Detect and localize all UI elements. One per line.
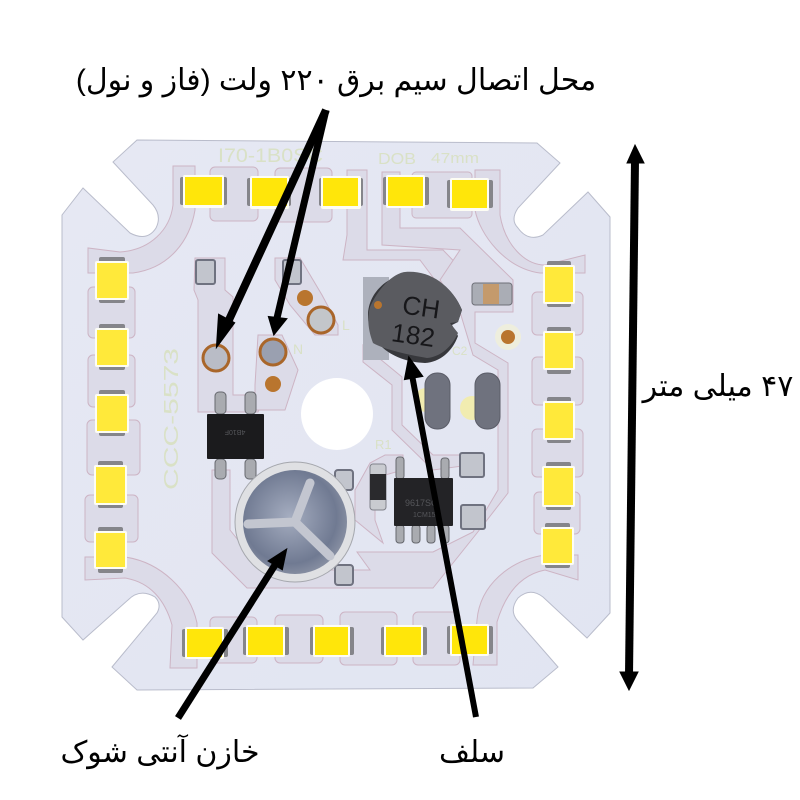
- center mounting hole: [301, 378, 373, 450]
- label: inductor: سلف: [439, 736, 505, 769]
- board outline: [62, 140, 610, 690]
- bridge rectifier chip: [207, 392, 264, 479]
- silkscreen labels: N: [293, 341, 303, 357]
- dimension arrow: 47 mm: [620, 145, 644, 690]
- driver IC: 9617SC: [405, 498, 438, 508]
- silkscreen labels: C2: [452, 344, 468, 358]
- silkscreen labels: DOB: [378, 151, 416, 168]
- LED strip: bottom row: [182, 624, 493, 659]
- bridge rectifier chip: 4B10F: [225, 428, 245, 435]
- solder pads and copper dots: [196, 260, 521, 529]
- arrow: to capacitor: [178, 550, 286, 718]
- label: anti-shock capacitor: خازن آنتی شوک: [60, 734, 260, 769]
- label: 47 millimeters: ۴۷ میلی متر: [641, 370, 793, 403]
- silkscreen labels: R1: [375, 437, 392, 452]
- copper traces: [85, 166, 585, 668]
- driver IC: [394, 457, 453, 543]
- inductor: CH: [401, 290, 442, 325]
- silkscreen labels: L: [342, 317, 350, 333]
- resistor: [370, 464, 386, 510]
- arrow: to inductor: [405, 358, 476, 717]
- LED strip: right column: [541, 261, 575, 568]
- LED strip: top row: [180, 175, 493, 211]
- silkscreen labels: [161, 146, 479, 490]
- arrow: to neutral terminal: [269, 110, 326, 334]
- driver IC: 1CM15: [413, 512, 436, 519]
- arrow: to live terminal: [217, 110, 326, 346]
- silkscreen labels: CCC-5573: [161, 348, 183, 490]
- inductor: [363, 272, 462, 363]
- circuit board: [62, 140, 610, 690]
- anti-shock capacitor: [235, 462, 355, 585]
- silkscreen labels: 47mm: [431, 150, 479, 167]
- heading: wire connection point: محل اتصال سیم برق ۲۲۰ ولت (فاز و نول): [76, 64, 596, 98]
- inductor: 182: [390, 317, 437, 353]
- LED strip: left column: [94, 257, 129, 573]
- silkscreen labels: I70-1B0SC: [218, 146, 323, 167]
